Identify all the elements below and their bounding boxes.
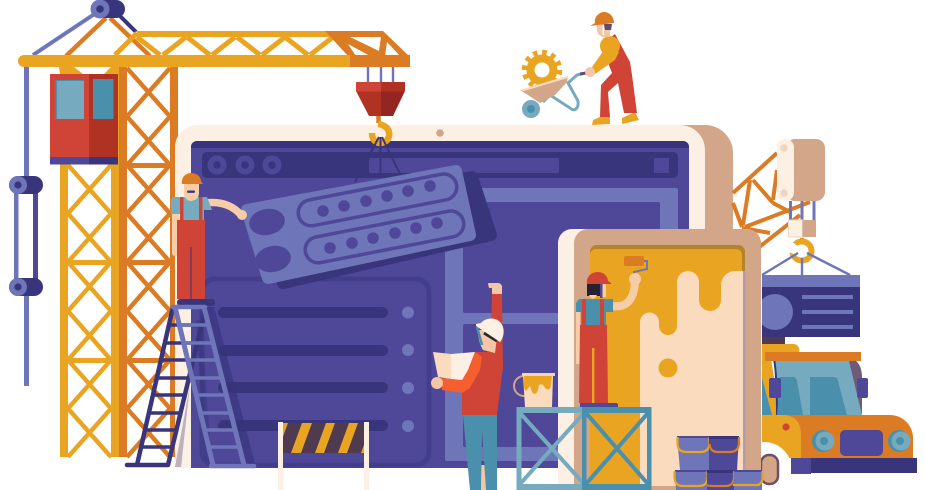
- truck: [736, 344, 917, 490]
- crane hook block: [355, 67, 405, 182]
- top left bucket: [677, 436, 710, 470]
- paint drop: [658, 358, 678, 378]
- left arm: [576, 312, 580, 364]
- gear: [524, 52, 560, 88]
- monitor screen: [191, 141, 689, 468]
- hanging panel shadow: [272, 177, 491, 283]
- left tower crane: [9, 0, 410, 457]
- truck bumper: [791, 458, 917, 474]
- roller: [624, 256, 647, 278]
- crane cables and mast top: [33, 0, 150, 56]
- bottom right bucket: [733, 470, 762, 490]
- hanging panel: [247, 171, 470, 278]
- worker reading blueprint: [431, 283, 504, 490]
- sleeve and hand: [431, 352, 482, 393]
- right small crane: [733, 139, 860, 344]
- left crate: [516, 407, 584, 490]
- head: [182, 173, 203, 201]
- crane pulley head: [777, 139, 825, 237]
- second paint monitor: [558, 229, 761, 490]
- wheelbarrow: [520, 73, 586, 118]
- crane cabin: [50, 74, 118, 164]
- torso and overalls: [576, 299, 613, 403]
- head: [587, 272, 611, 299]
- painter worker: [576, 256, 647, 407]
- webcam dot: [436, 129, 444, 137]
- jib: [18, 31, 410, 74]
- crane hook: [788, 238, 812, 260]
- truck cab: [762, 344, 868, 415]
- worker platform: [580, 403, 618, 407]
- blueprint: [433, 352, 475, 381]
- bottom left bucket: [674, 470, 708, 490]
- arm: [612, 273, 641, 306]
- hanging sign: [757, 253, 860, 344]
- screen right edge shade: [743, 271, 746, 486]
- browser toolbar: [202, 152, 678, 178]
- left list panel: [202, 279, 429, 465]
- left worker with arm on panel: [171, 173, 247, 306]
- monitor frame: [558, 229, 600, 490]
- truck tyre: [761, 455, 778, 484]
- right crate: [582, 407, 652, 490]
- scaffold crates: [516, 407, 652, 490]
- arm: [205, 202, 247, 220]
- worker figure: [585, 12, 639, 125]
- left hanging cable with pulleys: [9, 66, 43, 386]
- right content layout: [445, 188, 678, 461]
- legs: [463, 415, 497, 490]
- yellow paint screen: [590, 245, 745, 486]
- tower right bay lattice: [119, 67, 178, 457]
- torso and overalls: [171, 197, 215, 306]
- main browser monitor: [175, 125, 733, 468]
- top right bucket: [709, 436, 739, 470]
- hazard barrier: [277, 422, 372, 490]
- worker pushing wheelbarrow: [520, 12, 639, 125]
- ladder shadows: [175, 385, 190, 467]
- bottom middle bucket: [706, 470, 735, 490]
- head and helmet: [476, 318, 504, 353]
- back ladder: [127, 307, 206, 465]
- dripping cream paint: [640, 271, 745, 486]
- monitor tan side: [680, 125, 733, 235]
- ladder: [127, 307, 256, 467]
- tower left bay lattice: [60, 67, 119, 457]
- screen top shade: [590, 245, 745, 271]
- front ladder: [173, 307, 254, 466]
- torso: [462, 352, 503, 415]
- monitor cream frame: [175, 125, 705, 468]
- paint bucket: [514, 373, 555, 407]
- raised arm: [488, 283, 503, 370]
- screen top shadow: [191, 141, 689, 148]
- truck body: [736, 415, 913, 490]
- crane lattice: [733, 153, 810, 248]
- stacked paint buckets: [674, 436, 762, 490]
